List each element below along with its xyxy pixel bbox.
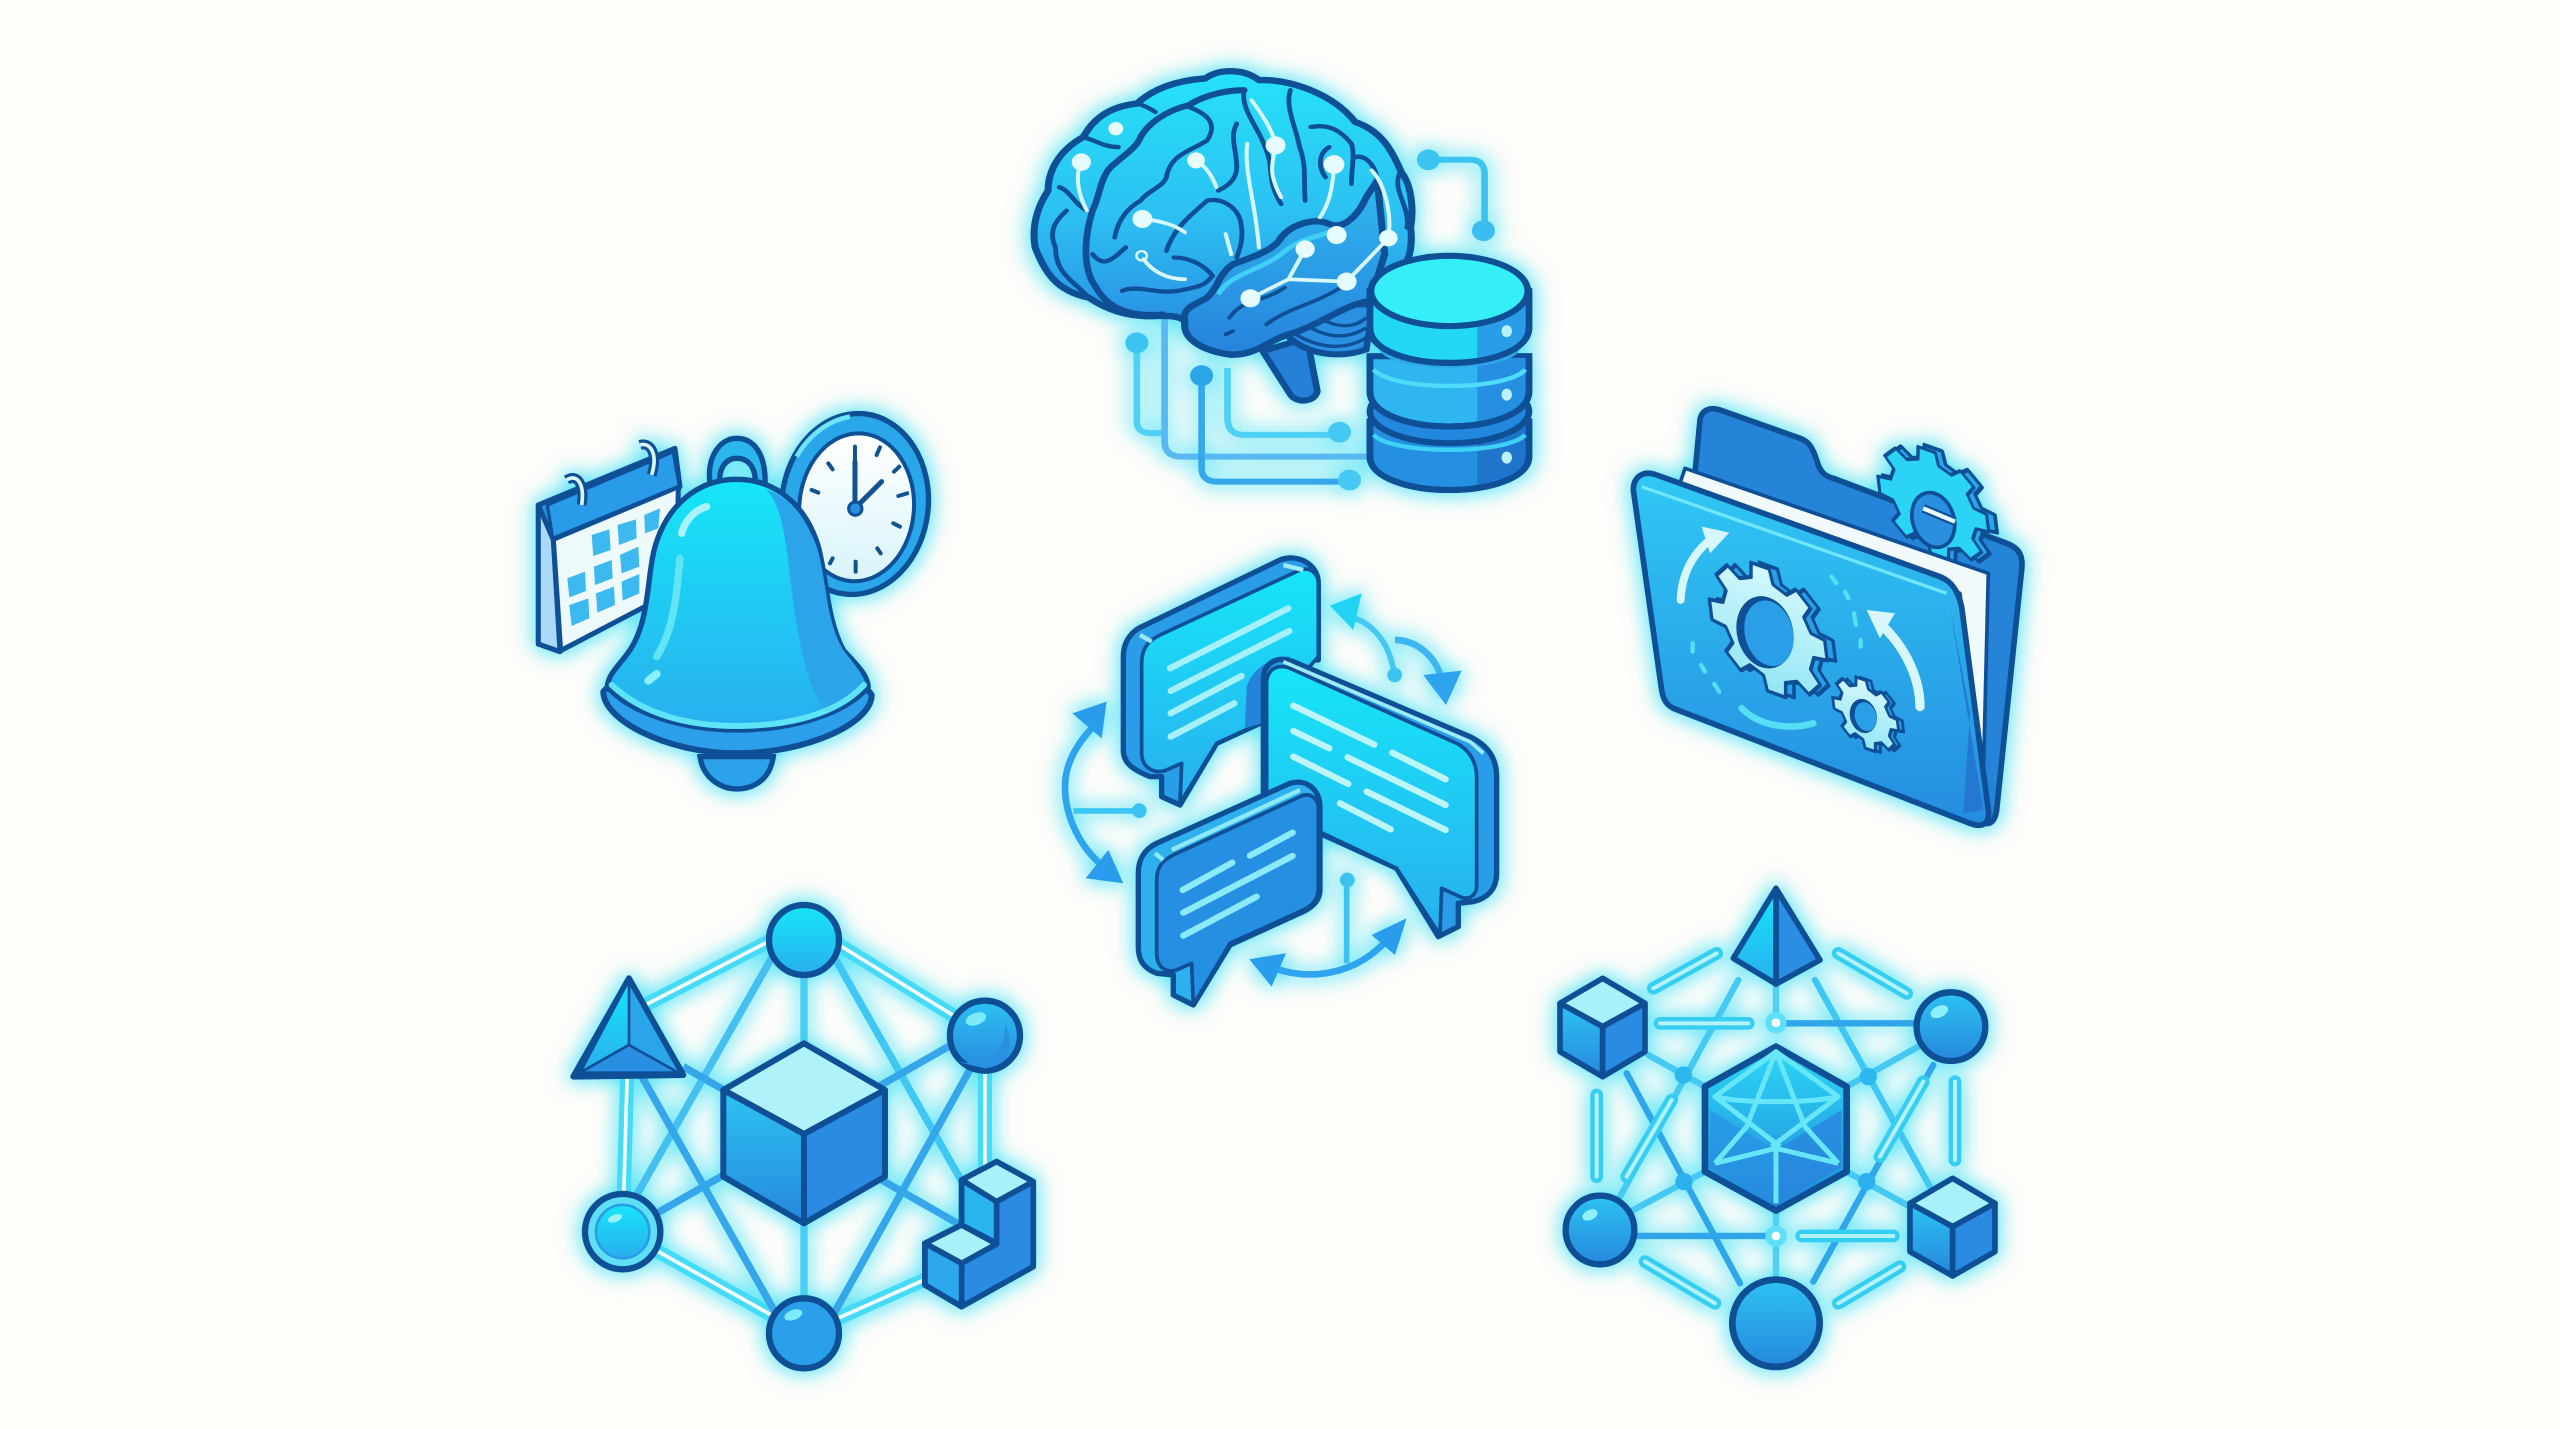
calendar — [538, 444, 680, 652]
bell rim — [603, 657, 872, 753]
brain cortex — [1034, 71, 1412, 334]
cube: bottom right — [1910, 1178, 1995, 1276]
outer ring links — [623, 923, 985, 1333]
bell body — [607, 479, 868, 730]
solid links — [1620, 980, 1933, 1283]
neural nodes — [1072, 100, 1398, 307]
bubble: top left — [1123, 558, 1318, 805]
icon: speech bubbles with arrows — [1065, 558, 1497, 1005]
icon: folder with gears — [1633, 409, 2022, 825]
pyramid node — [1733, 888, 1820, 984]
sphere: top right — [1917, 992, 1985, 1061]
rotation arrows — [1681, 527, 1920, 726]
small gear — [1829, 668, 1908, 762]
brain stem — [1263, 338, 1317, 401]
circuit traces — [1125, 149, 1495, 490]
right node — [950, 1001, 1020, 1071]
clock — [773, 406, 937, 602]
folder back — [1695, 409, 2022, 824]
bell clapper — [700, 757, 773, 789]
cerebellum — [1281, 304, 1374, 354]
capsule links — [1597, 953, 1955, 1303]
paper sheets — [1680, 468, 1988, 780]
bell loop — [709, 438, 765, 487]
crystal hub — [1705, 1047, 1847, 1211]
icon: network with cube hub — [573, 905, 1033, 1368]
icon: network with crystal hub — [1560, 888, 1995, 1367]
top node — [769, 905, 839, 975]
bell highlights — [612, 507, 864, 726]
pyramid node — [573, 978, 683, 1077]
junction dots — [1675, 1012, 1877, 1247]
exchange arrows — [1065, 593, 1462, 987]
left node — [585, 1194, 660, 1269]
circle: bottom — [1732, 1280, 1820, 1367]
cube: top left — [1560, 978, 1645, 1077]
bubble: bottom left — [1138, 782, 1320, 1005]
temporal lobe — [1184, 181, 1385, 355]
large gear — [1702, 545, 1843, 715]
brain folds — [1053, 90, 1407, 315]
bottom node — [769, 1298, 839, 1368]
back gear — [1872, 428, 2003, 580]
inner links — [630, 943, 972, 1333]
database stack — [1370, 256, 1529, 490]
center cube — [723, 1043, 885, 1223]
icon: brain with database — [1034, 71, 1529, 490]
sphere: bottom left — [1566, 1196, 1634, 1264]
bubble: large right — [1263, 659, 1497, 937]
folder front — [1633, 473, 1989, 825]
bell shading — [767, 490, 867, 708]
icon: bell with calendar and clock — [538, 406, 937, 789]
stepped block — [925, 1162, 1033, 1307]
